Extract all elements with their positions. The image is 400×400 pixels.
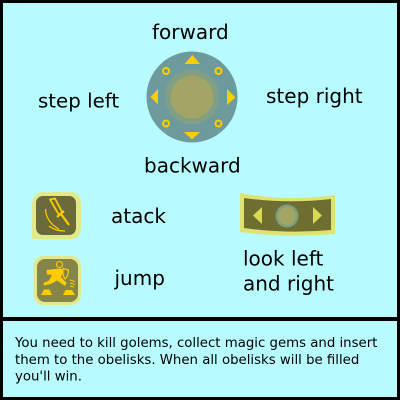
label: backward: backward <box>144 154 241 178</box>
description text: you'll win. <box>15 370 82 384</box>
icon: jump button <box>34 256 81 305</box>
panel: description <box>3 321 397 397</box>
icon: look slider <box>240 193 335 236</box>
label: look left and right: look left <box>243 246 324 270</box>
label: step right: step right <box>266 84 363 108</box>
label: step left: step left <box>38 90 119 112</box>
label: attack: atack <box>111 204 166 228</box>
icon: movement joystick <box>146 52 238 142</box>
description text: You need to kill golems, collect magic gems and insert <box>14 336 377 351</box>
label: look left and right <box>243 246 334 296</box>
label: forward: forward <box>152 20 229 44</box>
panel: controls <box>3 3 397 317</box>
label: look left and right: and right <box>243 272 334 296</box>
label: jump: jump <box>114 266 165 290</box>
icon: attack button <box>32 192 81 239</box>
description text: them to the obelisks. When all obelisks will be filled <box>15 353 359 368</box>
